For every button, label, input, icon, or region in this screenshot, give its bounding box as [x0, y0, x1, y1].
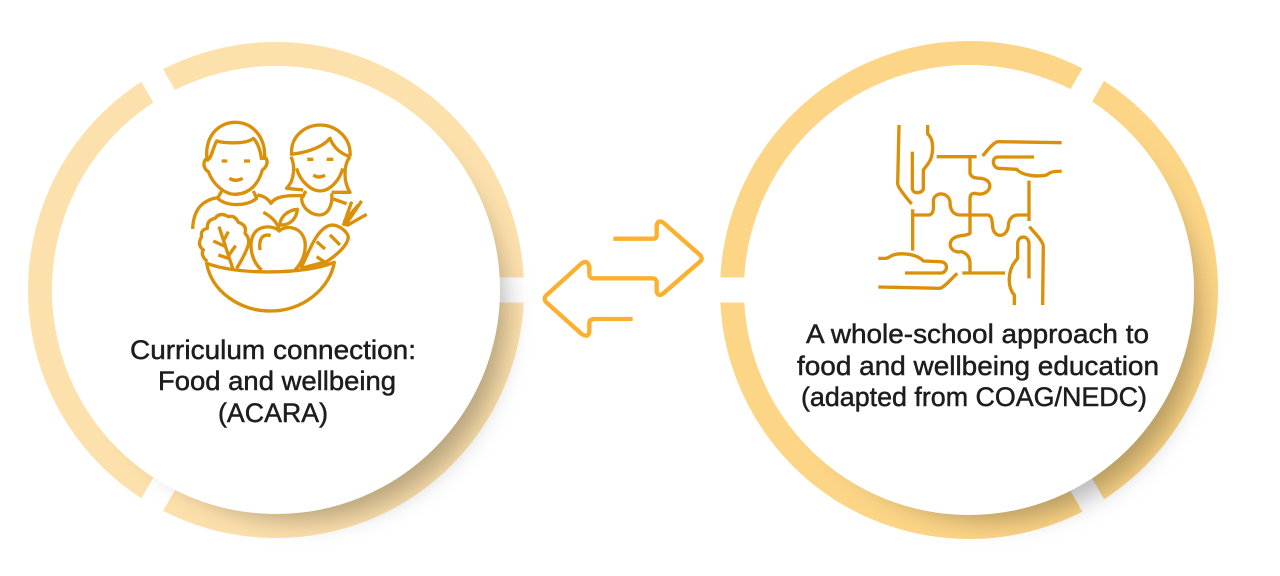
icon: four hands with puzzle	[878, 125, 1062, 305]
icon: two people with food bowl	[193, 122, 367, 311]
right circle drop shadow	[789, 110, 1199, 520]
heading: whole-school approach: food and wellbeing education	[797, 351, 1159, 381]
heading: curriculum connection: Curriculum connection:	[130, 335, 416, 365]
right white disc	[744, 65, 1194, 515]
arrow: two-way exchange	[545, 221, 702, 336]
right segmented ring	[732, 53, 1206, 527]
heading: curriculum connection: Food and wellbeing	[158, 366, 396, 396]
left circle drop shadow	[96, 110, 506, 520]
heading: curriculum connection	[130, 335, 416, 428]
left segmented ring	[40, 54, 512, 526]
heading: whole-school approach: A whole-school approach to	[806, 319, 1149, 349]
left white disc	[52, 66, 500, 514]
panel: curriculum connection circle	[40, 54, 512, 526]
panel: whole-school approach circle	[732, 53, 1206, 527]
heading: whole-school approach: (adapted from COAG/NEDC)	[801, 382, 1147, 412]
heading: curriculum connection: (ACARA)	[218, 398, 328, 428]
heading: whole-school approach	[797, 319, 1159, 412]
